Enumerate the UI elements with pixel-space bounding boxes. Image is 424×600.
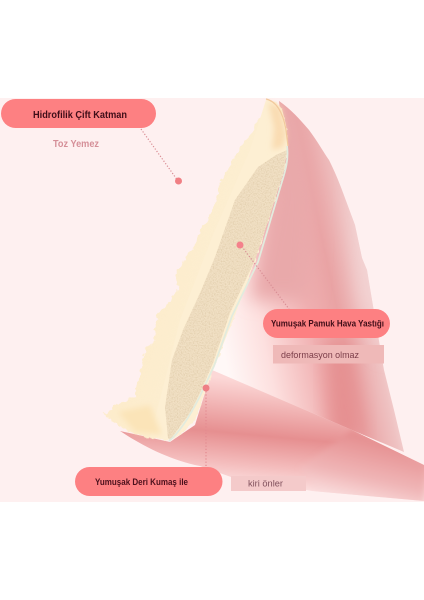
pill label: Yumuşak Deri Kumaş ile — [95, 477, 188, 487]
caption text: kiri önler — [248, 478, 283, 488]
caption text: deformasyon olmaz — [281, 350, 359, 360]
infographic canvas — [0, 98, 424, 502]
caption box — [231, 476, 306, 491]
connector line — [141, 129, 178, 181]
caption: Toz Yemez: Toz Yemez — [53, 139, 99, 150]
pill — [75, 467, 222, 496]
pill label: Yumuşak Pamuk Hava Yastığı — [271, 318, 384, 328]
connector line — [205, 388, 207, 467]
upper shadow plane — [238, 101, 404, 452]
rim of the skin at top — [266, 99, 288, 146]
caption: deformasyon olmaz — [273, 345, 384, 364]
cast shadow of the puff — [110, 90, 424, 505]
caption box — [273, 345, 384, 364]
warm tone along upper edge of skin — [268, 102, 286, 150]
outer sponge skin with jagged edge — [103, 99, 287, 440]
caption: kiri önler — [231, 476, 306, 491]
exposed foam core — [165, 150, 287, 440]
warm tone on lower skin — [118, 405, 162, 435]
marker dot — [236, 242, 244, 248]
marker dot — [175, 178, 182, 184]
callout: Yumuşak Pamuk Hava Yastığı — [236, 242, 390, 338]
pill — [263, 309, 390, 338]
callout: Yumuşak Deri Kumaş ile — [75, 384, 222, 496]
page background panel — [0, 98, 424, 502]
pill label: Hidrofilik Çift Katman — [33, 110, 127, 121]
callout: Hidrofilik Çift Katman — [1, 99, 182, 184]
sponge puff — [103, 99, 288, 441]
lower shadow plane — [110, 365, 424, 505]
clean right side of skin — [150, 100, 288, 440]
marker dot — [202, 384, 210, 392]
pill — [1, 99, 156, 128]
pale green outer rim — [169, 146, 288, 441]
connector line — [240, 244, 289, 309]
